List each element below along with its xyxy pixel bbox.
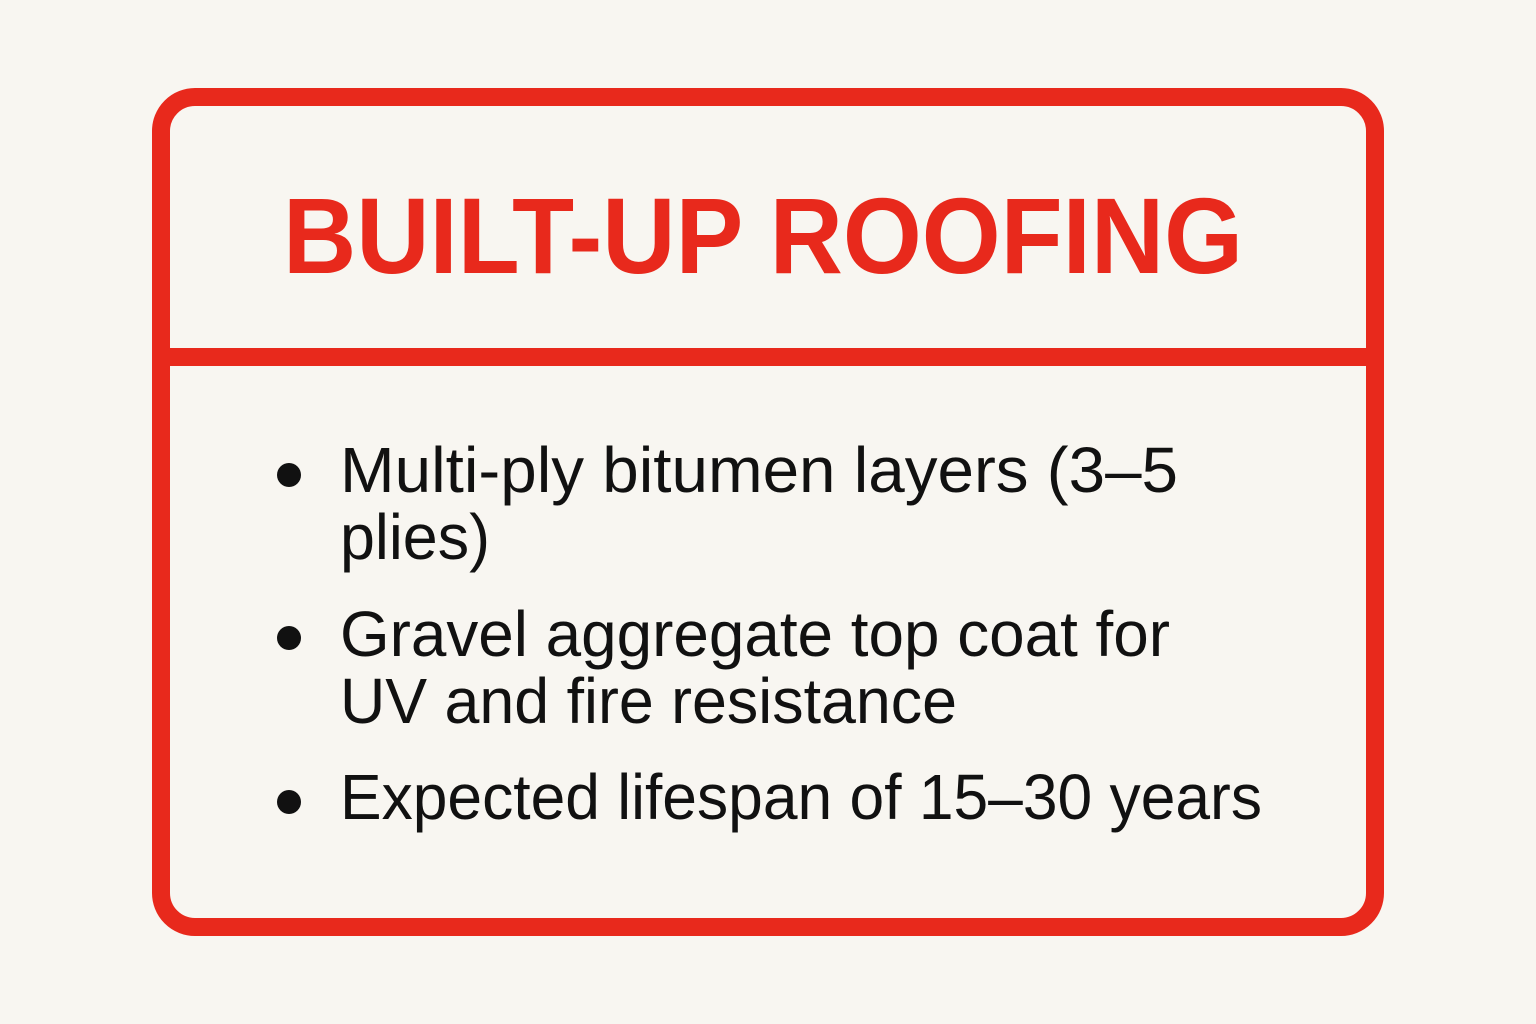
bullet 3: lifespan: Expected lifespan of 15–30 years [340,761,1262,833]
bullet 2: gravel top coat: Gravel aggregate top coat for [340,598,1170,670]
bullet 1: multi-ply layers: plies) [340,501,490,573]
bullet 2: gravel top coat: UV and fire resistance [340,665,957,737]
bullet 1: multi-ply layers [277,434,1178,573]
bullet 1: multi-ply layers: Multi-ply bitumen layers (3–5 [340,434,1178,506]
panel: card frame [161,97,1375,927]
title: BUILT-UP ROOFING [283,175,1243,296]
bullet 2: gravel top coat [277,598,1170,737]
bullet list [277,434,1262,833]
